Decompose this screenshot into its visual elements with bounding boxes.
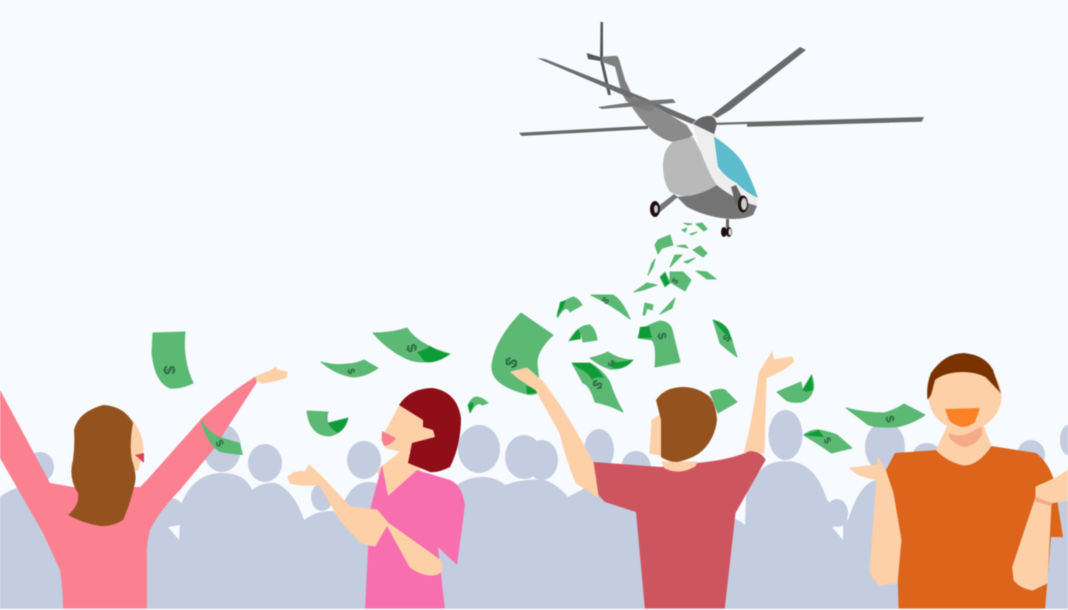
top [365, 465, 465, 610]
face [381, 405, 437, 453]
neck [937, 423, 991, 465]
dollar signs on bills [160, 276, 898, 446]
hair [399, 388, 461, 472]
person: man in red t-shirt [511, 352, 794, 610]
neck shadow [949, 425, 982, 447]
dollar signs on bills: $ [600, 295, 612, 307]
dollar signs on bills: $ [345, 367, 357, 376]
mouth [945, 408, 980, 427]
dollar signs on bills: $ [589, 376, 606, 392]
face and hand [120, 420, 143, 470]
rear rotor blade [537, 58, 696, 124]
neck [378, 450, 425, 500]
dollar signs on bills: $ [882, 414, 898, 424]
person: woman in pink top [0, 367, 287, 610]
tail stabiliser [598, 99, 676, 109]
crowd silhouettes [0, 410, 1068, 610]
mouth [135, 453, 144, 463]
dollar signs on bills: $ [403, 342, 421, 354]
dollar signs on bills: $ [655, 331, 670, 341]
belly [677, 185, 757, 219]
mouth [382, 431, 396, 446]
nose panel [693, 125, 758, 207]
raised arms [511, 368, 598, 497]
falling money bills [152, 223, 925, 453]
face [929, 362, 1001, 430]
body [663, 137, 717, 196]
rotor hub [693, 116, 716, 134]
person: man in orange t-shirt [850, 353, 1068, 610]
t-shirt [886, 446, 1063, 610]
dollar signs on bills: $ [160, 366, 177, 375]
hair [68, 405, 136, 526]
helicopter [519, 22, 924, 237]
cuff [1034, 497, 1052, 506]
dollar signs on bills: $ [721, 333, 733, 345]
landing gear [650, 185, 748, 237]
main rotor blades [519, 47, 924, 136]
tail boom [602, 56, 633, 102]
arms [850, 458, 901, 585]
face [650, 410, 668, 455]
top with raised arms [0, 377, 257, 610]
dollar signs on bills: $ [501, 353, 522, 372]
neck [662, 462, 697, 471]
person: woman in magenta top [288, 388, 465, 610]
dollar signs on bills: $ [821, 436, 833, 446]
dollar signs on bills: $ [670, 276, 680, 286]
dark bill folds [328, 300, 824, 437]
tail rotor [587, 22, 611, 95]
t-shirt [594, 451, 766, 610]
hair [656, 387, 717, 462]
bill over the arm [200, 418, 243, 455]
bill over the arm: $ [212, 438, 226, 449]
dollar signs on bills: $ [605, 359, 617, 369]
hair [927, 353, 1001, 400]
windshield [714, 137, 758, 198]
arms [288, 465, 442, 575]
